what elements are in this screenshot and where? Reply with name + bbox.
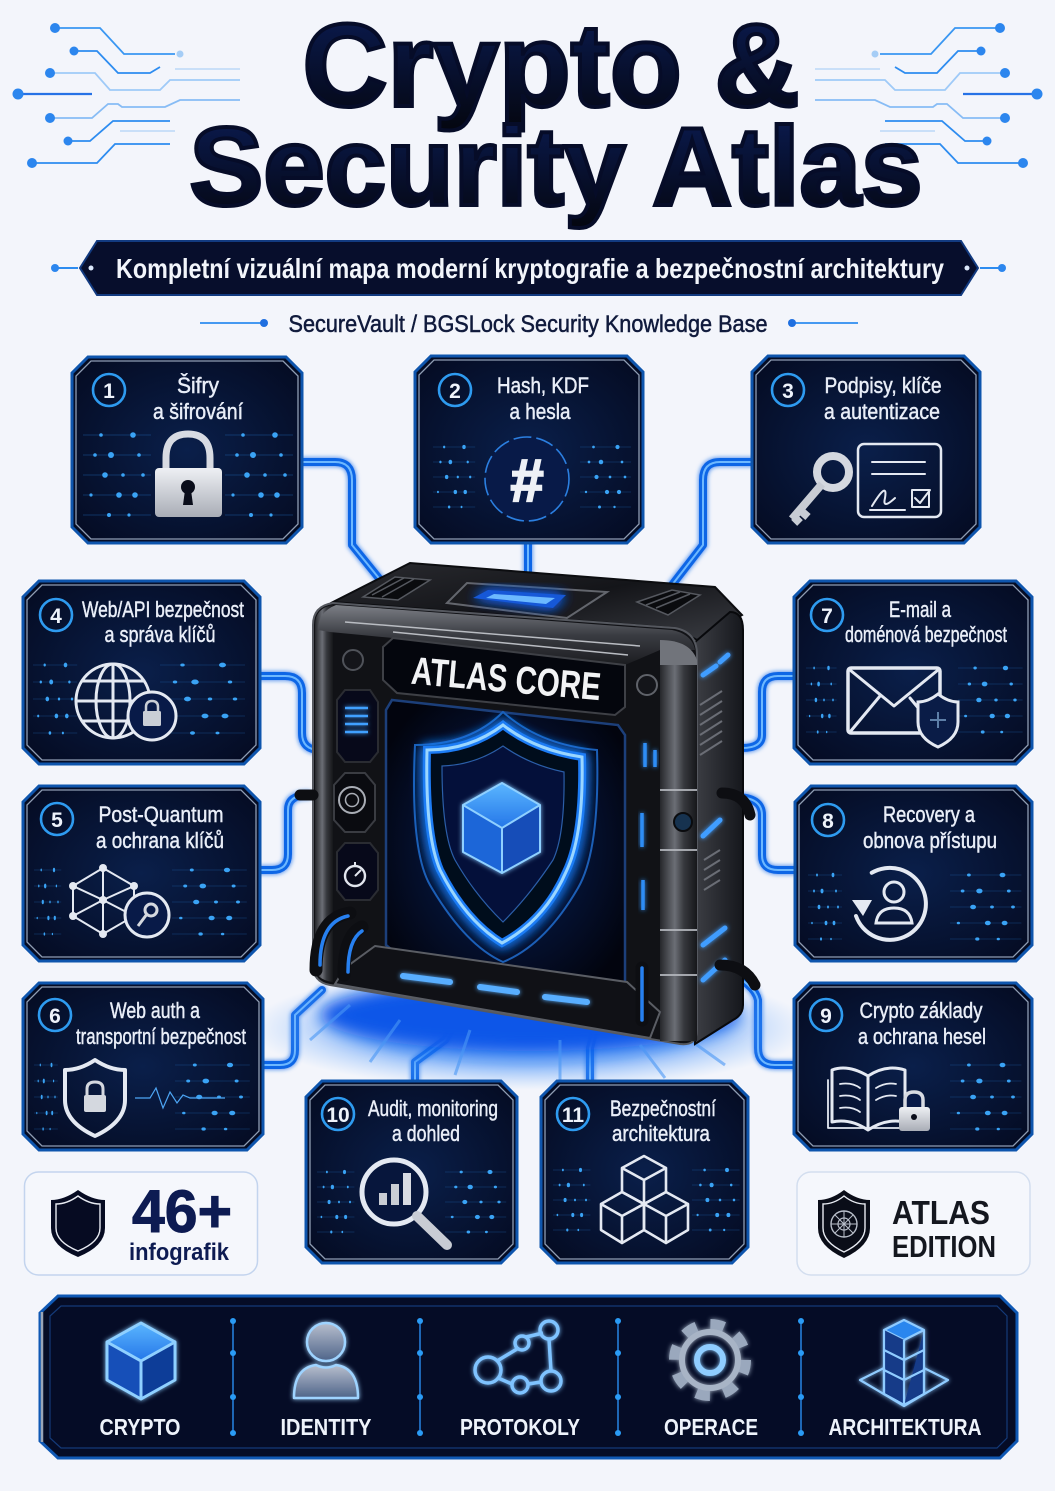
panel 1: Šifry a šifrování: a šifrování bbox=[153, 399, 243, 424]
panel 2: Hash, KDF a hesla: a hesla bbox=[510, 399, 571, 424]
panel 1: Šifry a šifrování: Šifry bbox=[177, 373, 219, 398]
panel 2: Hash, KDF a hesla bbox=[415, 356, 643, 543]
panel 5: Post-Quantum a ochrana klíčů: a ochrana klíčů bbox=[96, 828, 224, 853]
panel 9: Crypto základy a ochrana hesel: Crypto základy bbox=[860, 998, 982, 1023]
stat card: 46+ infografik: 46+ bbox=[132, 1178, 232, 1245]
panel 11: Bezpečnostní architektura: 11 bbox=[562, 1104, 584, 1127]
icon: globe with lock bbox=[76, 664, 176, 740]
plate: ATLAS CORE: ATLAS CORE bbox=[410, 650, 603, 709]
connectors bbox=[260, 462, 795, 1081]
panel 1: Šifry a šifrování bbox=[72, 357, 302, 543]
icon: protocols network bbox=[475, 1321, 561, 1393]
panel 2: Hash, KDF a hesla: Hash, KDF bbox=[497, 373, 589, 398]
panel 3: Podpisy, klíče a autentizace: Podpisy, klíče bbox=[824, 373, 942, 398]
icon: open book with lock bbox=[828, 1068, 930, 1131]
panel 11: Bezpečnostní architektura: architektura bbox=[612, 1121, 711, 1146]
panel 6: Web auth a transportní bezpečnost bbox=[23, 983, 263, 1150]
panel 7: E-mail a doménová bezpečnost: 7 bbox=[821, 605, 833, 628]
metal band bbox=[318, 605, 695, 665]
icon: hash bbox=[485, 437, 569, 521]
icon: hash: # bbox=[510, 447, 544, 514]
subtitle banner bbox=[51, 241, 1006, 295]
panel 10: Audit, monitoring a dohled bbox=[306, 1081, 517, 1263]
metal corner caps bbox=[343, 640, 697, 695]
decorative circuit lines, left bbox=[12, 23, 240, 168]
panel 1: Šifry a šifrování: 1 bbox=[103, 380, 115, 403]
bottom category bar: IDENTITY bbox=[280, 1414, 372, 1440]
icon: magnifier with chart bbox=[362, 1160, 447, 1245]
panel 4: Web/API bezpečnost a správa klíčů bbox=[23, 581, 260, 764]
panel 4: Web/API bezpečnost a správa klíčů: a správa klíčů bbox=[104, 622, 216, 647]
panel 9: Crypto základy a ochrana hesel: a ochrana hesel bbox=[858, 1024, 986, 1049]
icon: dark shield bbox=[51, 1190, 105, 1257]
panel 9: Crypto základy a ochrana hesel: 9 bbox=[820, 1005, 832, 1028]
panel 7: E-mail a doménová bezpečnost: E-mail a bbox=[889, 597, 952, 622]
panel 5: Post-Quantum a ochrana klíčů bbox=[23, 786, 260, 961]
title: Security Atlas bbox=[190, 105, 922, 229]
left control column bbox=[334, 690, 378, 900]
bottom category bar bbox=[40, 1296, 1017, 1458]
title bbox=[190, 0, 922, 229]
left metal strip bbox=[315, 605, 333, 982]
panel 8: Recovery a obnova přístupu: 8 bbox=[822, 810, 834, 833]
icon: padlock bbox=[155, 434, 222, 517]
panel 3: Podpisy, klíče a autentizace: a autentizace bbox=[824, 399, 940, 424]
side lights bbox=[703, 655, 728, 980]
panel 4: Web/API bezpečnost a správa klíčů: 4 bbox=[50, 605, 62, 628]
neon shield with cube bbox=[414, 712, 597, 962]
panel 6: Web auth a transportní bezpečnost: transportní bezpečnost bbox=[76, 1024, 246, 1049]
bottom category bar: ARCHITEKTURA bbox=[828, 1414, 982, 1440]
central device: Atlas Core bbox=[300, 563, 755, 1044]
icon: stacked cubes bbox=[601, 1156, 688, 1243]
panel 9: Crypto základy a ochrana hesel bbox=[794, 983, 1032, 1150]
panel 5: Post-Quantum a ochrana klíčů: 5 bbox=[51, 809, 63, 832]
stat card: 46+ infografik bbox=[24, 1172, 258, 1275]
bottom light bar bbox=[335, 946, 660, 1038]
screen bbox=[386, 700, 625, 990]
decorative circuit lines, right bbox=[815, 23, 1042, 168]
byline: SecureVault / BGSLock Security Knowledge Base bbox=[288, 311, 768, 338]
icon: identity person bbox=[294, 1323, 358, 1398]
panel 8: Recovery a obnova přístupu: obnova přístupu bbox=[863, 828, 997, 853]
right metal pillar bbox=[660, 665, 697, 1041]
right side vents bbox=[700, 691, 722, 890]
bottom category bar: OPERACE bbox=[664, 1414, 758, 1440]
panel 6: Web auth a transportní bezpečnost: 6 bbox=[49, 1005, 61, 1028]
icon: envelope with shield bbox=[848, 668, 958, 747]
icon: key and signed certificate bbox=[792, 444, 941, 523]
panel 8: Recovery a obnova přístupu bbox=[795, 786, 1032, 961]
cables and pipes bbox=[300, 793, 755, 1020]
panel 3: Podpisy, klíče a autentizace: 3 bbox=[782, 380, 794, 403]
panel 5: Post-Quantum a ochrana klíčů: Post-Quantum bbox=[98, 802, 224, 827]
floor glow bbox=[250, 966, 810, 1090]
stat card: 46+ infografik: infografik bbox=[129, 1239, 230, 1266]
title: Crypto & bbox=[302, 0, 800, 132]
front face bbox=[313, 603, 697, 1044]
panel 7: E-mail a doménová bezpečnost bbox=[794, 581, 1032, 764]
top face bbox=[333, 563, 742, 640]
panel 10: Audit, monitoring a dohled: 10 bbox=[326, 1104, 350, 1127]
panel 11: Bezpečnostní architektura: Bezpečnostní bbox=[610, 1096, 716, 1121]
icon: shield lock and signal bbox=[65, 1060, 225, 1136]
edition card: Atlas Edition: ATLAS bbox=[892, 1194, 990, 1231]
panel 11: Bezpečnostní architektura bbox=[541, 1081, 748, 1263]
edition card: Atlas Edition bbox=[797, 1172, 1030, 1275]
icon: architecture tower bbox=[860, 1320, 948, 1406]
bottom category bar: CRYPTO bbox=[100, 1414, 180, 1440]
icon: crypto cube bbox=[107, 1323, 175, 1399]
panel 6: Web auth a transportní bezpečnost: Web auth a bbox=[110, 998, 201, 1023]
icon: operations gear bbox=[674, 1324, 746, 1396]
icon: web shield bbox=[818, 1190, 870, 1258]
panel 10: Audit, monitoring a dohled: a dohled bbox=[392, 1121, 460, 1146]
panel 3: Podpisy, klíče a autentizace bbox=[752, 356, 980, 543]
top vents bbox=[363, 577, 700, 615]
panel 8: Recovery a obnova přístupu: Recovery a bbox=[883, 802, 976, 827]
bottom category bar: PROTOKOLY bbox=[460, 1414, 580, 1440]
plate: ATLAS CORE bbox=[383, 638, 625, 715]
panel 10: Audit, monitoring a dohled: Audit, monitoring bbox=[368, 1096, 498, 1121]
right side face bbox=[695, 612, 743, 1044]
icon: lattice with key bbox=[69, 864, 169, 938]
panel 4: Web/API bezpečnost a správa klíčů: Web/API bezpečnost bbox=[82, 597, 244, 622]
right screen lights bbox=[642, 743, 655, 910]
panel 2: Hash, KDF a hesla: 2 bbox=[449, 380, 461, 403]
top light module bbox=[447, 583, 607, 618]
icon: recovery arrow and person bbox=[852, 861, 936, 950]
edition card: Atlas Edition: EDITION bbox=[892, 1229, 996, 1264]
